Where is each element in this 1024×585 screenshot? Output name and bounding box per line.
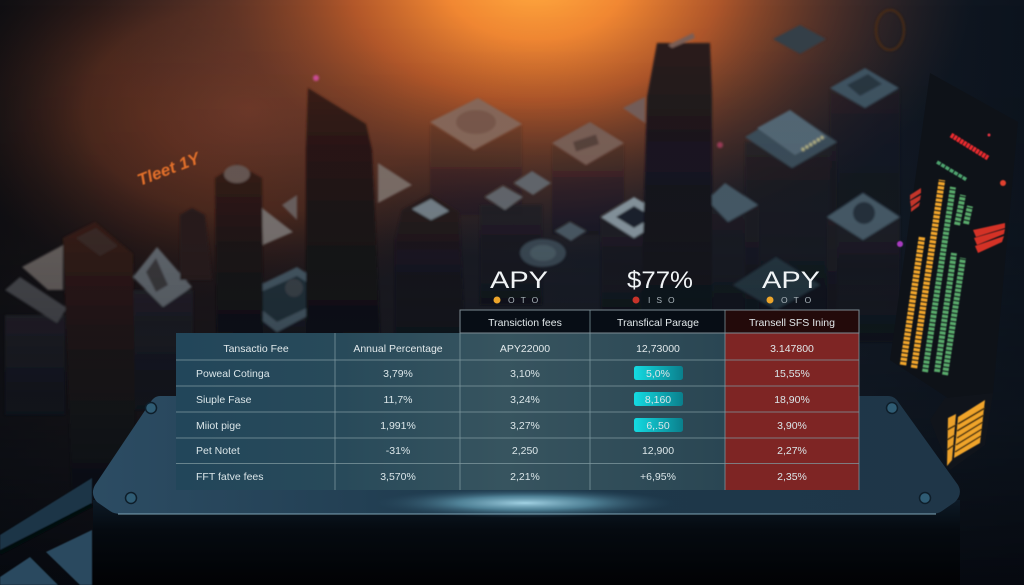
- row 5: 3,570%: [380, 471, 416, 483]
- black header band: [460, 310, 859, 333]
- row 2: 18,90%: [774, 394, 810, 406]
- green meters: [925, 187, 953, 372]
- header row: Annual Percentage: [353, 343, 443, 355]
- row 1: 5,0%: [646, 368, 670, 380]
- header row: 12,73000: [636, 343, 680, 355]
- chip pins: [802, 137, 823, 150]
- row 1: 3,79%: [383, 368, 413, 380]
- black header band: Transiction fees: [488, 317, 562, 329]
- right server tower with LED meters: [890, 73, 1018, 470]
- small tower: [180, 208, 212, 280]
- red chevrons: [973, 223, 1005, 237]
- row 5: +6,95%: [640, 471, 676, 483]
- black header band: Transfical Parage: [617, 317, 699, 329]
- row 1: 3,10%: [510, 368, 540, 380]
- column stat: APY right: APY: [762, 267, 820, 294]
- row 1: 15,55%: [774, 368, 810, 380]
- red display: [951, 135, 988, 158]
- tower B: [215, 164, 263, 333]
- platform: [93, 396, 960, 585]
- row 2: Siuple Fase: [196, 394, 252, 406]
- red column: [725, 333, 859, 490]
- tower E: [641, 43, 712, 310]
- column stat: APY: [490, 267, 548, 305]
- row 5: 2,35%: [777, 471, 807, 483]
- header row: APY22000: [500, 343, 550, 355]
- column stat: $77%: $77%: [627, 267, 693, 294]
- column stat: APY right: [762, 267, 820, 305]
- tower D: [395, 194, 465, 340]
- row 3: 3,27%: [510, 420, 540, 432]
- row 2: 11,7%: [384, 394, 412, 406]
- row 3: 3,90%: [777, 420, 807, 432]
- row 4: 2,250: [512, 445, 538, 457]
- black header band: Transell SFS Ining: [749, 317, 835, 329]
- row 2: 3,24%: [510, 394, 540, 406]
- column stat: $77%: [627, 267, 693, 305]
- row 4: [196, 445, 807, 457]
- column stat: $77%: ISO: [648, 295, 681, 305]
- small dots: [313, 75, 319, 81]
- column stat: APY: OTO: [508, 295, 544, 305]
- row 4: 12,900: [642, 445, 674, 457]
- background isometric city: [5, 10, 904, 500]
- row 4: -31%: [386, 445, 410, 457]
- angled orange label: Tleet 1Y: [135, 148, 204, 190]
- row 2: 8,160: [645, 394, 671, 406]
- floor panels bottom left: [0, 478, 92, 585]
- header row: 3.147800: [770, 343, 814, 355]
- screws: [126, 402, 930, 504]
- header row: Tansactio Fee: [223, 343, 289, 355]
- header row: [223, 343, 814, 355]
- orange vent block: [954, 400, 985, 458]
- orange meters: [903, 237, 922, 365]
- row 3: 1,991%: [380, 420, 416, 432]
- base block: [93, 500, 960, 585]
- column stat: APY right: OTO: [781, 295, 817, 305]
- dark building blocks: [5, 90, 900, 415]
- row 5: FFT fatve fees: [196, 471, 264, 483]
- far tiles: [5, 25, 900, 332]
- row 2: [196, 392, 810, 406]
- row 4: 2,27%: [777, 445, 807, 457]
- table body: [176, 333, 725, 490]
- column stat: APY: APY: [490, 267, 548, 294]
- row 3: [196, 418, 807, 432]
- top plate: [93, 396, 960, 514]
- row 5: 2,21%: [510, 471, 540, 483]
- comparison table: [176, 310, 859, 490]
- row 1: [196, 366, 810, 380]
- row 4: Pet Notet: [196, 445, 240, 457]
- green top strip: [937, 162, 967, 180]
- grid lines: [176, 310, 859, 490]
- row 3: Miiot pige: [196, 420, 241, 432]
- row 5: [196, 471, 807, 483]
- plate sheen: [375, 488, 675, 518]
- row 3: 6,.50: [646, 420, 670, 432]
- tower A: [63, 222, 136, 500]
- tower C: [306, 88, 380, 333]
- row 1: Poweal Cotinga: [196, 368, 270, 380]
